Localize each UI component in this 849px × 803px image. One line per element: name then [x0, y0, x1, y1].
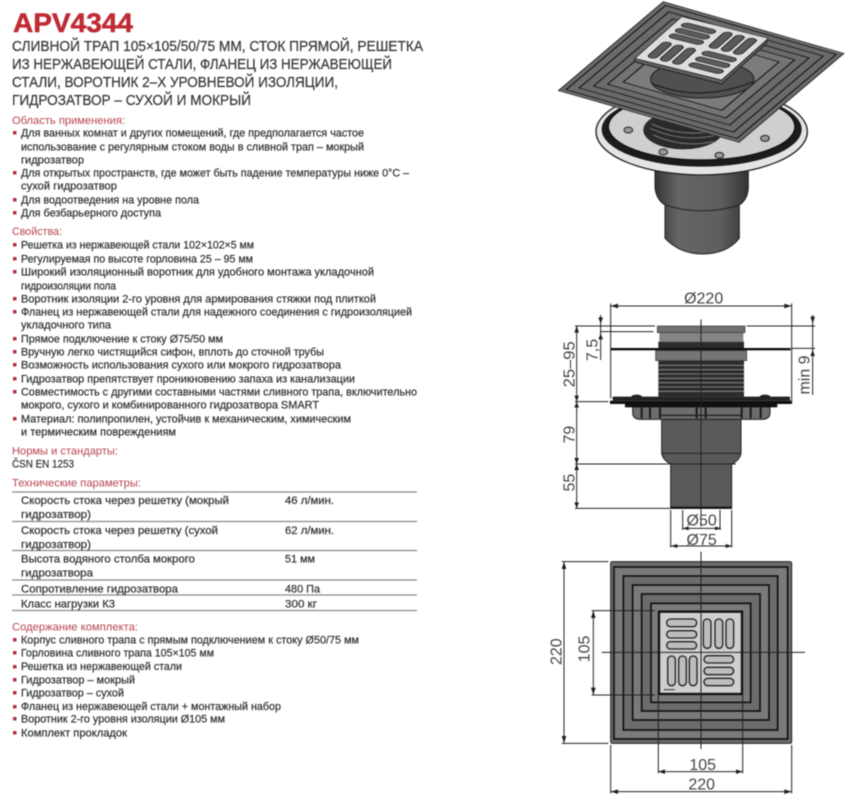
section: properties: Гидрозатвор препятствует проникновению запаха из канализации — [21, 374, 355, 386]
section: technical parameters table: Технические параметры: — [12, 478, 141, 490]
dimension: Ø50: Ø50 — [687, 512, 717, 529]
stainless steel grate — [659, 612, 742, 694]
top view dimension lines — [562, 552, 805, 793]
side view technical drawing — [561, 291, 815, 549]
dimension: 105 horizontal: 105 — [689, 757, 716, 774]
section: kit contents: Фланец из нержавеющей стали + монтажный набор — [21, 701, 281, 713]
section: properties: Прямое подключение к стоку Ø75/50 мм — [21, 334, 223, 346]
section: properties: гидроизоляции пола — [21, 280, 116, 292]
drain neck — [651, 61, 754, 98]
section: norms and standards: Нормы и стандарты: — [12, 446, 118, 458]
section: technical parameters table: 62 л/мин. — [285, 525, 334, 537]
section: technical parameters table: 300 кг — [285, 598, 317, 610]
dimension: min 9: min 9 — [796, 355, 813, 395]
round stainless flange with bolts — [596, 88, 807, 175]
section: technical parameters table: гидрозатвор) — [21, 509, 91, 521]
section: technical parameters table: 51 мм — [285, 554, 315, 566]
section: kit contents: Гидрозатвор – сухой — [21, 688, 124, 700]
section: properties: Вручную легко чистящийся сифон, вплоть до сточной трубы — [21, 346, 324, 358]
title: APV4344 — [13, 8, 133, 38]
section: technical parameters table — [12, 478, 417, 610]
section: properties: Фланец из нержавеющей стали для надежного соединения с гидроизоляцией — [21, 306, 412, 318]
section: properties: Регулируемая по высоте горловина 25 – 95 мм — [21, 254, 253, 266]
section: application area: Для ванных комнат и других помещений, где предполагается частое — [21, 128, 364, 140]
section: kit contents: Решетка из нержавеющей стали — [21, 661, 182, 673]
section: application area: Для водоотведения на уровне пола — [21, 194, 199, 206]
section: kit contents: Воротник 2-го уровня изоляции Ø105 мм — [21, 714, 225, 726]
section: properties: Возможность использования сухого или мокрого гидрозатвора — [21, 360, 341, 372]
section: norms and standards — [12, 446, 118, 470]
section: application area: сухой гидрозатвор — [21, 180, 117, 192]
section: properties: Воротник изоляции 2-го уровня для армирования стяжки под плиткой — [21, 294, 376, 306]
drain outlet pipe — [655, 170, 748, 254]
section: application area: Область применения: — [12, 115, 125, 127]
section: kit contents: Содержание комплекта: — [12, 622, 138, 634]
product description heading: ГИДРОЗАТВОР – СУХОЙ И МОКРЫЙ — [12, 91, 251, 109]
section: application area: использование с регулярным стоком воды в сливной трап – мокрый — [21, 142, 364, 154]
drain body section — [610, 326, 792, 509]
square collar with concentric steps — [611, 562, 792, 743]
section: properties: Совместимость с другими составными частями сливного трапа, включительно — [21, 386, 417, 398]
section: technical parameters table: гидрозатвора — [21, 568, 93, 580]
section: norms and standards: ČSN EN 1253 — [12, 458, 74, 470]
section: application area: Для безбарьерного доступа — [21, 208, 161, 220]
stainless steel grate — [635, 17, 768, 84]
section: application area: гидрозатвор — [21, 154, 84, 166]
product description heading: СЛИВНОЙ ТРАП 105×105/50/75 ММ, СТОК ПРЯМОЙ, РЕШЕТКА — [12, 37, 423, 55]
section: kit contents: Гидрозатвор – мокрый — [21, 674, 135, 686]
side view arrowheads — [574, 304, 815, 548]
section: application area — [12, 115, 409, 220]
section: kit contents: Горловина сливного трапа 105×105 мм — [21, 648, 214, 660]
product description heading: ИЗ НЕРЖАВЕЮЩЕЙ СТАЛИ, ФЛАНЕЦ ИЗ НЕРЖАВЕЮЩЕЙ — [12, 55, 392, 73]
section: technical parameters table: Высота водяного столба мокрого — [21, 554, 195, 566]
section: technical parameters table: Скорость стока через решетку (сухой — [21, 525, 218, 537]
square insulation collar — [558, 2, 844, 142]
top view technical drawing — [549, 552, 805, 794]
section: technical parameters table: гидрозатвор) — [21, 539, 91, 551]
section: properties: мокрого, сухого и комбинированного гидрозатвора SMART — [21, 400, 320, 412]
section: properties: Свойства: — [12, 226, 62, 238]
dimension: 55: 55 — [561, 474, 578, 492]
section: properties: укладочного типа — [21, 320, 111, 332]
top view arrowheads — [562, 562, 792, 794]
section: properties — [12, 226, 417, 438]
dimension: 79: 79 — [561, 426, 578, 444]
section: properties: и термическим повреждениям — [21, 426, 176, 438]
product description heading: СТАЛИ, ВОРОТНИК 2–Х УРОВНЕВОЙ ИЗОЛЯЦИИ, — [12, 73, 338, 91]
section: application area: Для открытых пространств, где может быть падение температуры ниже 0°C – — [21, 168, 409, 180]
dimension: 25–95: 25–95 — [562, 341, 579, 387]
section: technical parameters table: Сопротивление гидрозатвора — [21, 584, 178, 596]
section: properties: Широкий изоляционный воротник для удобного монтажа укладочной — [21, 266, 374, 278]
section: technical parameters table: Класс нагрузки К3 — [21, 598, 115, 610]
product illustration: floor drain isometric view — [558, 2, 844, 254]
section: kit contents: Корпус сливного трапа с прямым подключением к стоку Ø50/75 мм — [21, 634, 359, 646]
section: technical parameters table: 480 Па — [285, 584, 320, 596]
dimension: 7,5: 7,5 — [584, 339, 601, 361]
section: properties: Материал: полипропилен, устойчив к механическим, химическим — [21, 414, 351, 426]
dimension: Ø75: Ø75 — [687, 532, 717, 549]
dimension: 220 vertical: 220 — [549, 638, 566, 665]
product description heading — [12, 37, 423, 109]
dimension: 220 horizontal: 220 — [688, 777, 715, 794]
section: properties: Решетка из нержавеющей стали 102×102×5 мм — [21, 240, 254, 252]
section: technical parameters table: Скорость стока через решетку (мокрый — [21, 495, 229, 507]
section: technical parameters table: 46 л/мин. — [285, 495, 334, 507]
dimension: Ø220: Ø220 — [684, 291, 723, 308]
section: kit contents: Комплект прокладок — [21, 728, 127, 740]
side view dimension lines — [575, 303, 815, 547]
dimension: 105 vertical: 105 — [577, 636, 594, 662]
section: kit contents — [12, 622, 359, 740]
